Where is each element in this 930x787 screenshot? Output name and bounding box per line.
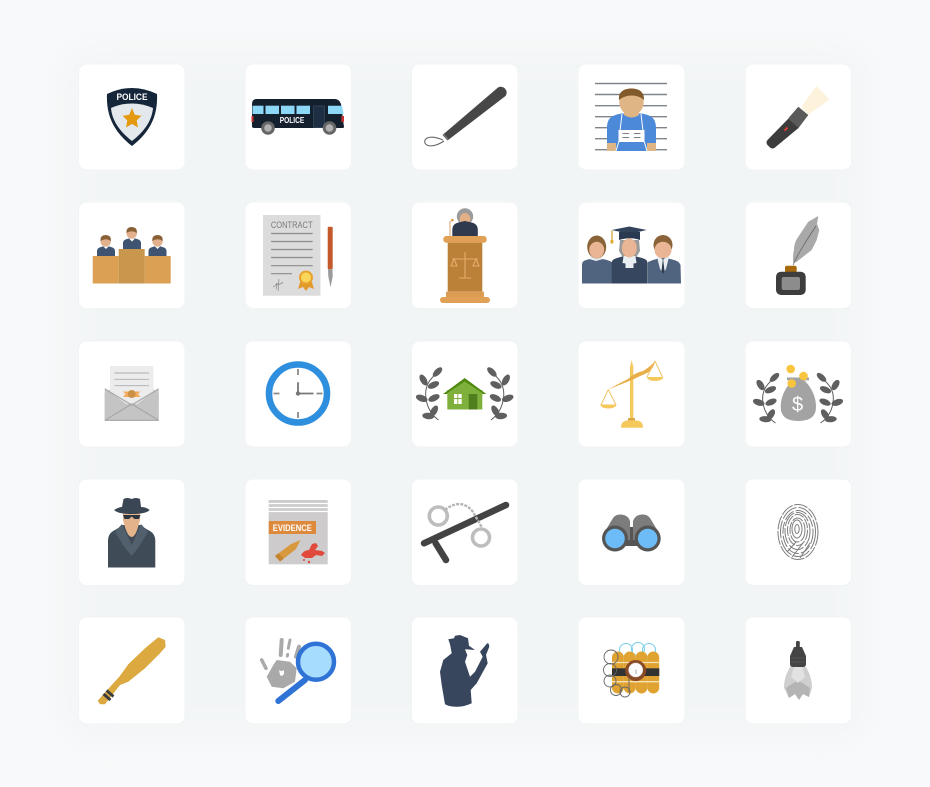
card: quill and ink (745, 202, 852, 308)
icon: evidence folder: EVIDENCE (273, 523, 312, 533)
icon: contract and pen: CONTRACT (271, 220, 313, 230)
icon: dynamite time bomb (604, 642, 659, 697)
card: police bus (245, 64, 352, 170)
card: flashlight (745, 64, 852, 170)
card: judge at podium (412, 202, 518, 308)
icon: open envelope with letter (105, 366, 159, 421)
card: baseball bat (78, 617, 185, 724)
card: contract (245, 202, 352, 308)
card: time bomb (578, 617, 685, 724)
card: jury (78, 202, 185, 308)
icon: prisoner mugshot (595, 84, 667, 151)
icon: green house (443, 378, 486, 410)
icon: jury panel (93, 227, 171, 284)
icon: left laurel (752, 371, 781, 423)
icon: police bus: POLICE (280, 116, 305, 125)
card: graduates (578, 202, 685, 308)
icon: quill and inkwell (776, 216, 819, 295)
card: light bulb (745, 617, 852, 724)
icon: wall clock (269, 364, 327, 422)
icon: detective with gun silhouette (440, 635, 489, 707)
card: money bag and laurels (745, 341, 852, 447)
icon: binoculars (602, 514, 661, 552)
icon: left laurel (415, 366, 444, 420)
card: binoculars (578, 479, 685, 586)
card: mugshot (578, 64, 685, 170)
card: nightstick and handcuffs (412, 479, 518, 586)
icon: fingerprint (778, 504, 818, 560)
card: handprint and magnifier (245, 617, 352, 724)
icon: baseball bat (98, 637, 166, 704)
card: envelope letter (78, 341, 185, 447)
card: fingerprint (745, 479, 852, 586)
icon: baton with wrist loop (425, 87, 507, 146)
card: detective silhouette (412, 617, 518, 724)
card: spy (78, 479, 185, 586)
icon: judge podium (440, 208, 490, 303)
icon: scales of justice (600, 360, 664, 428)
card: golden scales (578, 341, 685, 447)
icon: magnifying glass (278, 644, 334, 701)
icon: flashlight (766, 86, 830, 148)
card: house and laurels (412, 341, 518, 447)
card: clock (245, 341, 352, 447)
icon: spy in trench coat (108, 498, 155, 568)
icon: money bag with coins: $ (792, 394, 803, 416)
icon: right laurel (486, 366, 514, 420)
icon: lawyers and graduate (582, 226, 681, 284)
icon: nightstick with handcuffs (424, 504, 506, 560)
card: evidence (245, 479, 352, 586)
icon: handprint (262, 640, 299, 688)
card: police baton (412, 64, 518, 170)
icon: CFL light bulb (784, 641, 812, 700)
icon: right laurel (815, 371, 844, 423)
icon: police shield: POLICE (116, 92, 148, 103)
card: police badge (78, 64, 185, 170)
